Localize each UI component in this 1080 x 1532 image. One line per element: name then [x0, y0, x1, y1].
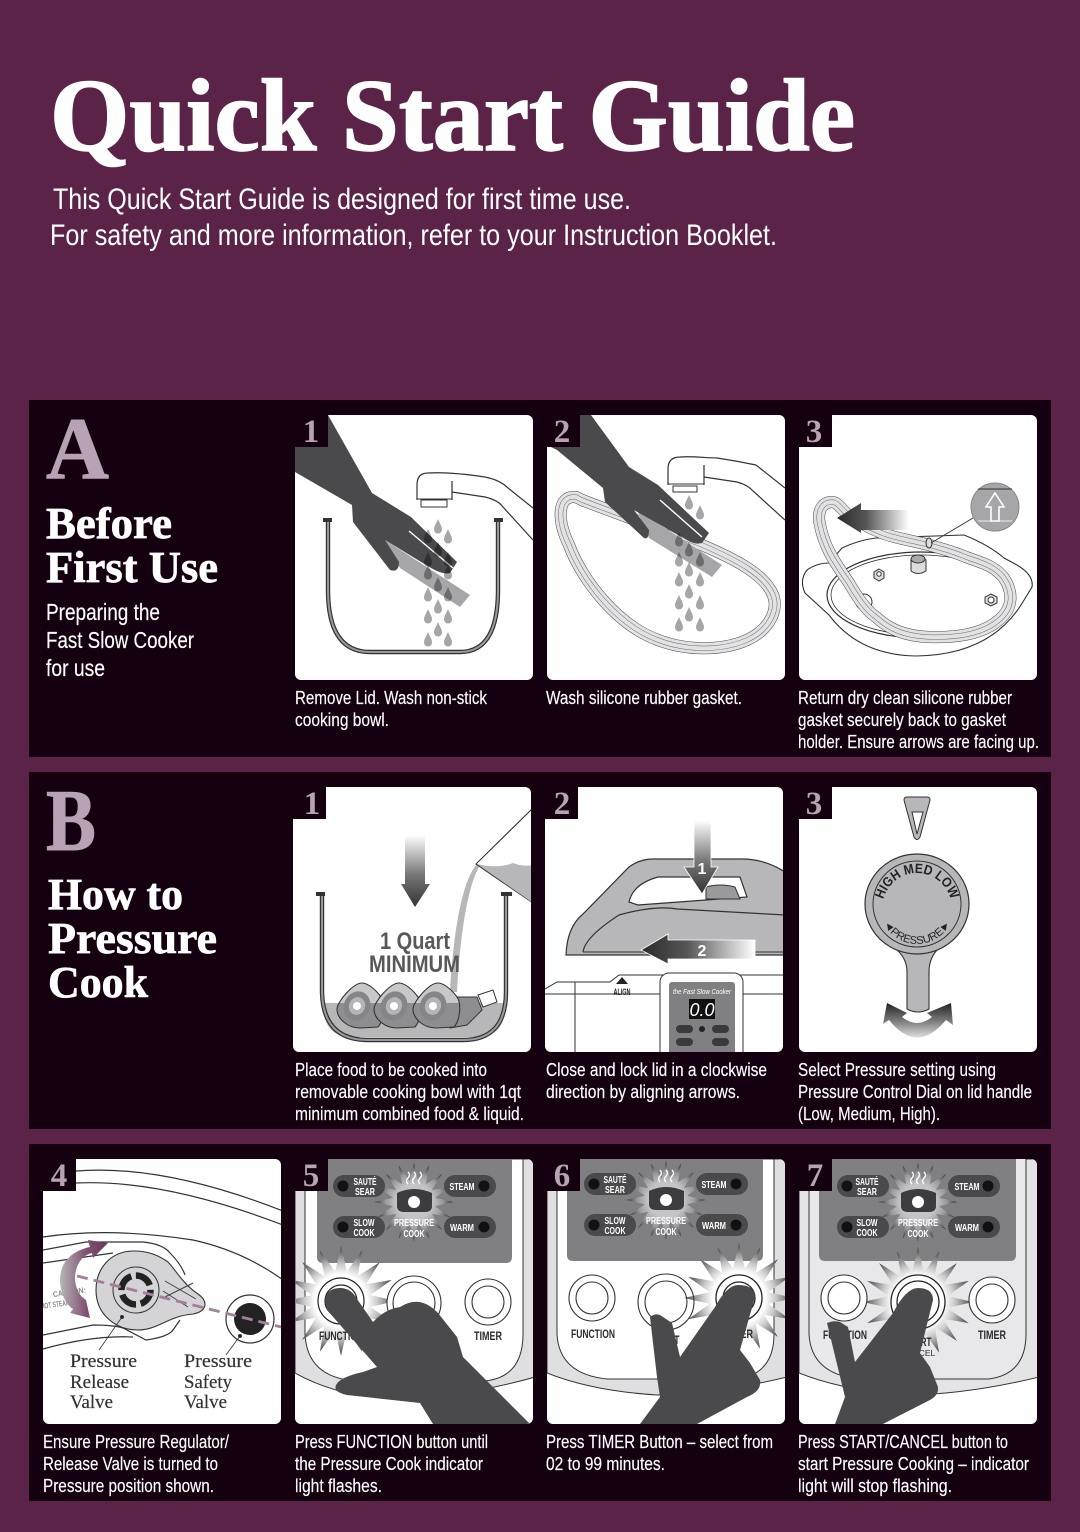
control panel: COOK — [856, 1227, 878, 1239]
captions: steps 4-7: light will stop flashing. — [798, 1476, 952, 1496]
badge 4 — [43, 1158, 76, 1194]
subheading text: for use — [46, 655, 105, 681]
captions: steps 4-7: start Pressure Cooking – indicator — [798, 1454, 1029, 1474]
label: pressure safety valve: Pressure — [184, 1351, 252, 1372]
glow burst on start button — [863, 1247, 973, 1357]
badge 1 — [295, 414, 328, 450]
badge 5 — [295, 1158, 328, 1194]
captions: section A: cooking bowl. — [295, 710, 389, 730]
control panel: SLOW — [604, 1215, 626, 1227]
step B1: fill bowl illustration — [293, 786, 533, 1052]
caution text: CAUTION: — [52, 1286, 86, 1299]
captions: steps 4-7: Release Valve is turned to — [43, 1454, 218, 1474]
arrow 2: turn left: 2 — [698, 943, 707, 960]
control panel: SAUTÉ — [354, 1175, 376, 1188]
badge 1: 1 — [303, 414, 319, 450]
step 6: timer button illustration — [547, 1158, 794, 1424]
captions: section B: (Low, Medium, High). — [798, 1104, 940, 1124]
captions: steps 4-7: 02 to 99 minutes. — [546, 1454, 665, 1474]
control panel: WARM — [702, 1220, 726, 1232]
control panel: SLOW — [354, 1217, 375, 1229]
pointer — [904, 797, 930, 840]
captions: section A: holder. Ensure arrows are facing up. — [798, 732, 1039, 752]
buttons and labels: FUNCTION — [571, 1327, 615, 1341]
captions: section A — [295, 688, 1039, 752]
caution text — [43, 1288, 86, 1309]
heading: Before First Use: First Use — [46, 543, 218, 592]
panel: section B steps 4-7 — [29, 1144, 1051, 1501]
panel: section B how to pressure cook, steps 1-3 — [29, 772, 1051, 1129]
glow burst on timer button — [684, 1244, 785, 1349]
control panel: STEAM — [954, 1181, 980, 1193]
label: 1 Quart minimum: 1 Quart — [380, 928, 450, 955]
buttons and labels — [569, 1274, 762, 1347]
badge 4: 4 — [51, 1158, 67, 1194]
captions: section B: Pressure Control Dial on lid handle — [798, 1082, 1032, 1102]
control panel: COOK — [908, 1228, 929, 1240]
section letter A: A — [46, 401, 109, 498]
control panel: SAUTÉ — [856, 1175, 878, 1188]
captions: steps 4-7: Press FUNCTION button until — [295, 1432, 488, 1452]
captions: steps 4-7: Ensure Pressure Regulator/ — [43, 1432, 229, 1452]
captions: section B: Close and lock lid in a clockwise — [546, 1060, 767, 1080]
arrow 1: press down: 1 — [698, 861, 707, 878]
captions: steps 4-7: the Pressure Cook indicator — [295, 1454, 483, 1474]
control panel — [317, 1159, 512, 1263]
step 4: valves illustration — [40, 1158, 283, 1424]
label: align mark: ALIGN — [614, 987, 630, 997]
pressing hand — [827, 1288, 938, 1424]
step A1: wash bowl illustration — [295, 414, 533, 680]
heading: How to Pressure Cook: Pressure — [48, 914, 217, 963]
step B3: pressure dial illustration — [799, 786, 1037, 1052]
captions: section B: minimum combined food & liquid. — [295, 1104, 524, 1124]
label: pressure release valve: Release — [70, 1372, 129, 1393]
badge 7 — [799, 1158, 832, 1194]
arrow: curved rotation — [60, 1240, 108, 1318]
badge 3: 3 — [806, 786, 822, 822]
control panel: COOK — [604, 1225, 626, 1237]
subheading text: Preparing the — [46, 599, 160, 625]
pressing hand — [640, 1285, 760, 1424]
control panel: COOK — [354, 1227, 375, 1239]
food pieces — [337, 983, 497, 1028]
captions: steps 4-7: Pressure position shown. — [43, 1476, 214, 1496]
control panel: WARM — [450, 1222, 474, 1234]
glow burst on function button — [295, 1246, 392, 1356]
badge 6 — [547, 1158, 580, 1194]
leader lines — [99, 1315, 242, 1355]
control panel on base: the Fast Slow Cooker — [673, 989, 732, 996]
buttons and labels: CANCEL — [901, 1348, 936, 1358]
badge 6: 6 — [554, 1158, 570, 1194]
control panel: SAUTÉ — [604, 1173, 626, 1186]
heading: How to Pressure Cook: Cook — [48, 958, 149, 1007]
arrow 1: press down — [684, 820, 718, 894]
badge 2: 2 — [554, 786, 570, 822]
panel: section A before first use — [29, 400, 1051, 757]
intro text — [50, 183, 777, 252]
label: pressure release valve: Valve — [70, 1392, 113, 1413]
buttons and labels: TIMER — [978, 1328, 1006, 1342]
control panel: STEAM — [450, 1181, 475, 1193]
title: Quick Start Guide — [50, 59, 855, 173]
buttons and labels: TIMER — [725, 1327, 753, 1341]
pressure safety valve — [226, 1295, 274, 1343]
label: pressure safety valve: Safety — [184, 1372, 232, 1393]
captions: steps 4-7: Press TIMER Button – select from — [546, 1432, 773, 1452]
control panel: PRESSURE — [898, 1217, 938, 1229]
badge 3: 3 — [806, 414, 822, 450]
arrow: move left — [837, 503, 909, 533]
heading: Before First Use: Before — [46, 499, 172, 548]
label: align mark — [614, 977, 630, 997]
step B2: close lid illustration — [545, 786, 785, 1063]
badge 1: 1 — [304, 786, 320, 822]
caution text: HOT STEAM VENT — [40, 1296, 85, 1311]
step A3: return gasket illustration — [799, 414, 1037, 680]
pressure dial: HIGH MED LOW — [874, 864, 960, 899]
control panel: SEAR — [355, 1186, 375, 1198]
pressing hand — [325, 1288, 530, 1424]
heading: Before First Use — [46, 499, 218, 592]
badge 2 — [547, 414, 580, 450]
badge 7: 7 — [807, 1158, 823, 1194]
captions: section B: removable cooking bowl with 1qt — [295, 1082, 521, 1102]
badge 3 — [799, 786, 832, 822]
label: 1 Quart minimum — [370, 932, 459, 972]
buttons and labels: START — [904, 1335, 932, 1349]
icon: gasket up-arrow callout — [971, 483, 1019, 531]
buttons and labels: START — [652, 1333, 680, 1347]
control panel on base — [660, 972, 744, 1052]
badge 1 — [293, 786, 326, 822]
label: 1 Quart minimum: MINIMUM — [369, 951, 460, 978]
arrow 2: turn left — [641, 934, 755, 964]
section letter B: B — [46, 773, 96, 870]
captions: section A: Return dry clean silicone rubber — [798, 688, 1012, 708]
captions: section A: Wash silicone rubber gasket. — [546, 688, 742, 708]
label: pressure safety valve: Valve — [184, 1392, 227, 1413]
label: pressure release valve: Pressure — [70, 1351, 137, 1372]
step 7: start button illustration — [799, 1158, 1039, 1424]
control panel on base: 0.0 — [689, 1000, 715, 1020]
heading: How to Pressure Cook: How to — [48, 870, 183, 919]
label: pressure safety valve — [184, 1354, 252, 1408]
control panel: STEAM — [702, 1179, 727, 1191]
arrow: curved two-way — [883, 1003, 953, 1038]
badge 2 — [545, 786, 578, 822]
captions: section B: Place food to be cooked into — [295, 1060, 487, 1080]
step 5: function button illustration — [286, 1158, 535, 1424]
control panel: SLOW — [856, 1217, 878, 1229]
heading: How to Pressure Cook — [48, 870, 217, 1007]
arrow: add down — [401, 835, 430, 907]
cooker base — [545, 975, 785, 1052]
pressure dial — [864, 853, 970, 1012]
badge 3 — [799, 414, 832, 450]
control panel: PRESSURE — [646, 1215, 686, 1227]
intro text: For safety and more information, refer to your Instruction Booklet. — [50, 219, 777, 252]
badge 5: 5 — [303, 1158, 319, 1194]
control panel: WARM — [955, 1222, 979, 1234]
captions: section A: gasket securely back to gasket — [798, 710, 1006, 730]
buttons and labels: TIMER — [474, 1329, 502, 1343]
pressure release valve — [96, 1251, 205, 1330]
intro text: This Quick Start Guide is designed for first time use. — [53, 183, 631, 216]
captions: steps 4-7: light flashes. — [295, 1476, 382, 1496]
captions: section A: Remove Lid. Wash non-stick — [295, 688, 488, 708]
captions: steps 4-7 — [43, 1432, 1029, 1496]
control panel: COOK — [404, 1228, 425, 1240]
subheading text — [46, 599, 194, 681]
captions: section B: Select Pressure setting using — [798, 1060, 996, 1080]
control panel: PRESSURE — [394, 1217, 434, 1229]
control panel: SEAR — [605, 1184, 625, 1196]
buttons and labels — [318, 1276, 511, 1343]
captions: steps 4-7: Press START/CANCEL button to — [798, 1432, 1008, 1452]
captions: section B: direction by aligning arrows. — [546, 1082, 740, 1102]
buttons and labels: FUNCTION — [823, 1328, 867, 1342]
buttons and labels — [821, 1275, 1015, 1358]
dashed alignment line — [77, 1276, 281, 1327]
control panel — [567, 1159, 763, 1261]
pressure dial: ◄PRESSURE► — [887, 924, 947, 944]
subheading text: Fast Slow Cooker — [46, 627, 194, 653]
captions: section B — [295, 1060, 1032, 1124]
step A2: wash gasket illustration — [547, 414, 785, 680]
buttons and labels: FUNCTION — [319, 1329, 363, 1343]
control panel — [819, 1159, 1016, 1261]
badge 2: 2 — [554, 414, 570, 450]
control panel: SEAR — [857, 1186, 877, 1198]
control panel: COOK — [656, 1226, 677, 1238]
label: pressure release valve — [70, 1354, 136, 1408]
